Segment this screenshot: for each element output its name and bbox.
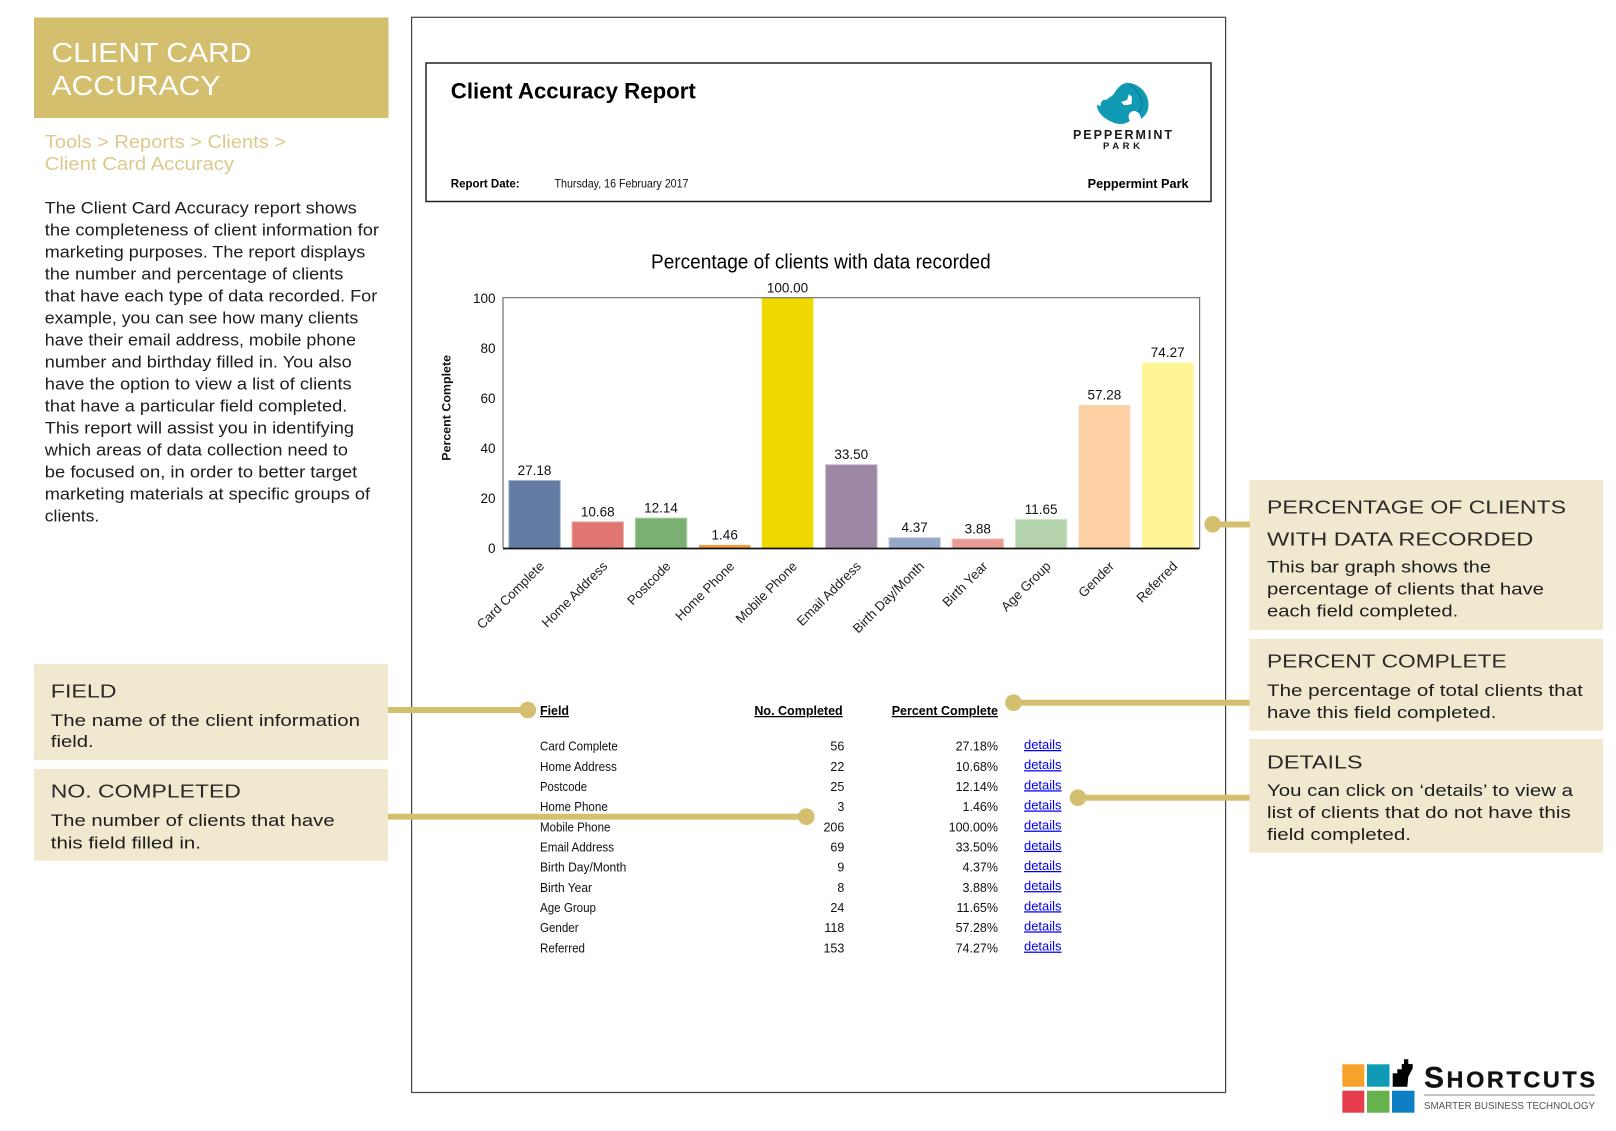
x axis labels: Home Phone [672,559,737,624]
text block: report description: have their email address, mobile phone [45,332,356,350]
table counts: 56 [830,740,844,754]
bar value labels: 33.50 [834,447,868,462]
table counts: 9 [837,861,844,875]
bar value labels: 12.14 [644,501,678,516]
text block: report description: be focused on, in order to better target [45,464,358,482]
table percentages: 100.00% [949,820,998,834]
table detail links: details [1024,879,1062,893]
x axis labels: Referred [1133,559,1180,605]
panel: no. completed callout: this field filled in. [51,834,201,852]
report date value: Thursday, 16 February 2017 [554,176,689,190]
table counts: 22 [830,760,844,774]
text block: report description: The Client Card Accuracy report shows [45,200,357,218]
panel: percent complete callout: PERCENT COMPLETE [1267,650,1507,671]
text block: report description: example, you can see how many clients [45,310,358,328]
table header: Field [540,704,569,718]
table field names: Birth Day/Month [540,861,626,875]
bars [509,298,1194,548]
chart title: Percentage of clients with data recorded [651,251,991,273]
table detail links: details [1024,738,1062,752]
arrow: percent complete connector [1005,694,1250,711]
plot frame [503,298,1200,548]
table field names: Mobile Phone [540,820,610,834]
table counts: 3 [837,800,844,814]
y axis labels: 20 [480,491,496,506]
y axis title: Percent Complete [442,355,454,461]
bar value labels: 4.37 [901,520,928,535]
panel: title banner [34,18,388,118]
table detail links: details [1024,778,1062,792]
table percentages: 57.28% [956,921,998,935]
table field names: Email Address [540,840,614,854]
breadcrumb: Tools > Reports > Clients > [45,131,286,152]
icon: Peppermint Park logo [1073,83,1172,152]
table percentages: 3.88% [963,881,998,895]
arrow: field connector [388,702,536,718]
bar value labels: 3.88 [965,521,991,536]
x axis labels: Age Group [998,559,1054,614]
panel: details callout: list of clients that do not have this [1267,804,1571,822]
table percentages: 33.50% [956,840,998,854]
table detail links: details [1024,919,1062,933]
table field names [540,740,626,955]
breadcrumb: Client Card Accuracy [45,153,235,174]
panel: no. completed callout: The number of clients that have [51,812,335,830]
panel: title banner: CLIENT CARD [52,37,252,68]
table counts: 25 [830,780,844,794]
x axis labels: Postcode [624,559,674,608]
panel: percent complete callout: have this field completed. [1267,704,1496,722]
bar value labels [518,281,1185,542]
table field names: Postcode [540,780,587,794]
y axis labels: 60 [480,391,496,406]
x axis labels: Birth Year [939,558,991,610]
arrow: no. completed connector [388,808,815,825]
panel: details callout: You can click on ‘details’ to view a [1267,782,1574,800]
table detail links: details [1024,859,1062,873]
bar value labels: 11.65 [1025,502,1057,517]
x axis labels: Home Address [539,558,611,630]
panel: field callout: The name of the client information [51,712,360,730]
table field names: Gender [540,921,579,935]
table detail links: details [1024,839,1062,853]
bar value labels: 74.27 [1151,345,1185,360]
text block: report description: have the option to view a list of clients [45,376,352,394]
text block: report description: that have each type of data recorded. For [45,288,378,306]
table header [540,704,998,718]
panel: no. completed callout: NO. COMPLETED [51,781,241,802]
x axis labels [474,558,1180,636]
x axis labels: Card Complete [474,559,547,632]
y axis labels: 100 [473,291,496,306]
table percentages: 1.46% [963,800,998,814]
bar value labels: 27.18 [518,463,551,478]
y axis labels: 80 [480,341,496,356]
table detail links: details [1024,819,1062,833]
panel: title banner: ACCURACY [52,70,221,101]
table percentages: 4.37% [963,861,998,875]
text block: report description: that have a particular field completed. [45,398,347,416]
table field names: Card Complete [540,740,618,754]
panel: details callout: field completed. [1267,826,1411,844]
bar chart [442,281,1200,636]
panel: percentage of clients callout [1249,480,1603,630]
table counts: 8 [837,881,844,895]
panel: percent complete callout [1249,639,1603,731]
panel: percentage of clients callout: each field completed. [1267,602,1458,620]
icon: Peppermint Park logo: PARK [1103,141,1140,152]
table detail links: details [1024,798,1062,812]
text block: report description: which areas of data collection need to [44,442,348,460]
x axis labels: Birth Day/Month [850,559,927,636]
table percentages: 11.65% [957,901,998,915]
company name: Peppermint Park [1088,176,1189,191]
icon: Shortcuts logo: SMARTER BUSINESS TECHNOLOGY [1424,1100,1595,1112]
table detail links: details [1024,758,1062,772]
icon: Shortcuts logo [1342,1059,1595,1113]
text block: report description: marketing purposes. The report displays [45,244,365,262]
panel: details callout [1249,739,1603,853]
panel: report page frame [412,17,1226,1092]
arrow: chart connector [1204,516,1250,533]
panel: percentage of clients callout: This bar graph shows the [1267,558,1491,576]
table percentages: 74.27% [956,941,998,955]
x axis labels: Email Address [794,558,864,629]
x axis labels: Gender [1075,558,1117,600]
icon: Peppermint Park logo: PEPPERMINT [1073,128,1172,142]
table field names: Birth Year [540,881,592,895]
text block: report description: the number and percentage of clients [45,266,343,284]
panel: field callout [34,664,388,760]
panel: details callout: DETAILS [1267,752,1362,773]
panel: report header [426,63,1211,202]
panel: field callout: field. [51,733,94,751]
bar value labels: 57.28 [1088,388,1121,403]
table counts: 153 [823,941,844,955]
text block: report description: the completeness of client information for [45,222,380,240]
panel: percentage of clients callout: WITH DATA RECORDED [1267,529,1533,550]
report date label: Report Date: [451,176,520,190]
table field names: Age Group [540,901,596,915]
table counts: 69 [830,840,844,854]
icon: Shortcuts logo: SHORTCUTS [1424,1062,1595,1095]
table percentages: 10.68% [956,760,998,774]
panel: no. completed callout [34,769,388,861]
text block: report description: This report will assist you in identifying [45,420,354,438]
x axis labels: Mobile Phone [732,559,800,626]
panel: percentage of clients callout: PERCENTAGE OF CLIENTS [1267,496,1566,517]
table percentages [949,740,998,955]
table detail links: details [1024,940,1062,954]
breadcrumb [45,131,286,174]
table header: No. Completed [754,704,843,718]
y axis labels: 40 [480,441,496,456]
table detail links [1024,738,1062,954]
table header: Percent Complete [892,704,998,718]
bar value labels: 10.68 [581,504,615,519]
arrow: details connector [1070,789,1250,806]
bar value labels: 1.46 [712,527,738,542]
panel: percent complete callout: The percentage of total clients that [1267,682,1583,700]
table percentages: 12.14% [956,780,998,794]
text block: report description: clients. [45,508,99,526]
y axis labels: 0 [488,541,496,556]
table counts: 206 [823,820,844,834]
table detail links: details [1024,899,1062,913]
table field names: Home Phone [540,800,608,814]
bar value labels: 100.00 [767,281,808,296]
table counts [823,740,844,955]
data table [540,704,1062,955]
report title: Client Accuracy Report [451,78,696,103]
table field names: Referred [540,941,585,955]
table counts: 24 [830,901,844,915]
text block: report description [44,200,380,526]
text block: report description: marketing materials at specific groups of [45,486,370,504]
y axis labels [473,291,496,556]
table counts: 118 [824,921,844,935]
text block: report description: number and birthday filled in. You also [45,354,352,372]
table percentages: 27.18% [956,740,998,754]
table field names: Home Address [540,760,617,774]
panel: percentage of clients callout: percentage of clients that have [1267,580,1544,598]
panel: field callout: FIELD [51,681,116,702]
